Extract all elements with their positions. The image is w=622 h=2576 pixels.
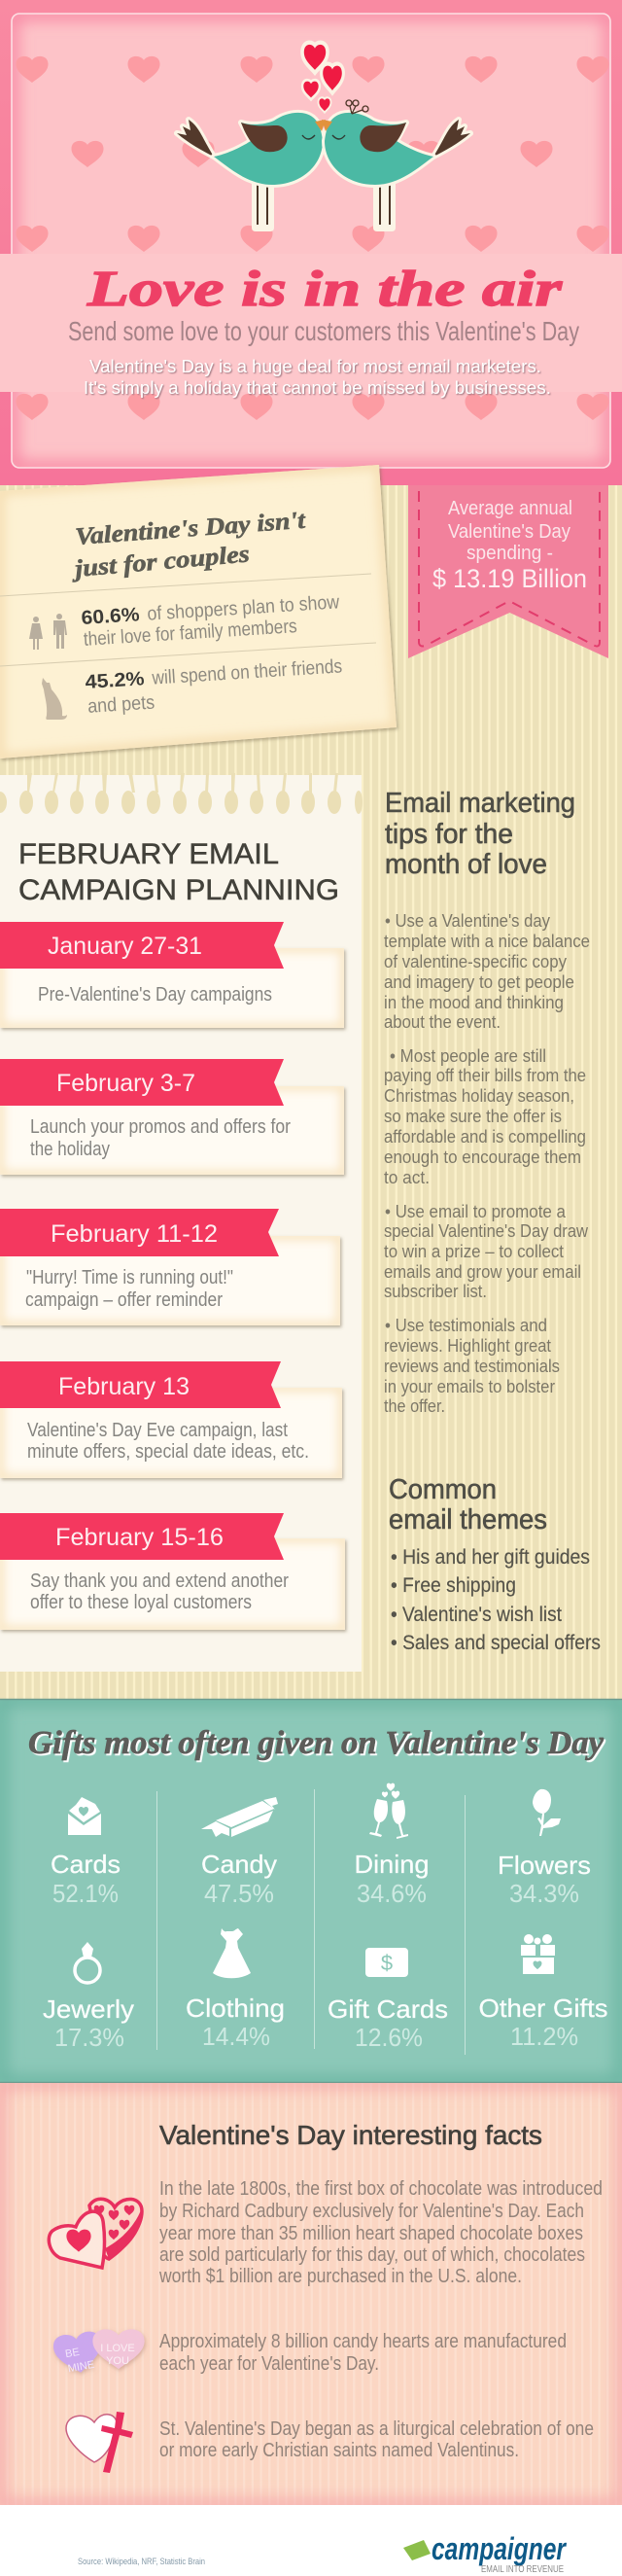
gift: clothing: 14.4% (202, 2022, 270, 2051)
item: February 11-12: "Hurry! Time is running out!" (26, 1267, 233, 1288)
fact: chocolate (158, 2178, 603, 2287)
heading (70, 508, 307, 582)
theme list: • Valentine's wish list (391, 1604, 562, 1626)
icon: candy hearts (52, 2329, 145, 2376)
fact: saint: or more early Christian saints named Valentinus. (159, 2440, 519, 2461)
panel: email campaign planning (0, 773, 363, 1672)
stat: friends: 45.2% (85, 668, 145, 693)
tip 1: template with a nice balance (384, 932, 590, 951)
icon: woman and man (29, 614, 67, 650)
torn paper holes (0, 773, 363, 814)
intro text (84, 356, 551, 398)
stat: family (81, 591, 342, 651)
gift: dining: Dining (354, 1850, 430, 1879)
source: Source: Wikipedia, NRF, Statistic Brain (78, 2557, 205, 2567)
item: February 3-7: Launch your promos and offers for (30, 1116, 291, 1138)
item: February 15-16: Say thank you and extend another (30, 1570, 289, 1592)
fact: candy hearts: each year for Valentine's Day. (159, 2353, 379, 2375)
tip 4: reviews. Highlight great (384, 1336, 551, 1356)
striped background (0, 485, 622, 1699)
tip 3: emails and grow your email (384, 1262, 581, 1282)
tip 3: to win a prize – to collect (384, 1242, 564, 1261)
heading: Valentine's Day interesting facts (159, 2120, 542, 2150)
item: February 13: February 13 (58, 1373, 190, 1400)
stat: family: of shoppers plan to show (147, 591, 340, 625)
gift: dining: 34.6% (357, 1879, 427, 1908)
tip 3 (384, 1202, 589, 1301)
intro text: Valentine's Day is a huge deal for most email marketers. (89, 356, 541, 376)
gift: cards: 52.1% (52, 1879, 119, 1908)
gift: clothing: Clothing (186, 1994, 285, 2023)
fact: chocolate: worth $1 billion are purchased in the U.S. alone. (158, 2266, 522, 2287)
item: February 3-7: the holiday (30, 1139, 110, 1160)
icon: logo envelope (403, 2540, 431, 2560)
gift: flowers: 34.3% (509, 1879, 579, 1908)
item: January 27-31 (0, 922, 344, 1028)
heading: just for couples (70, 541, 251, 582)
heading: Valentine's Day isn't (74, 508, 307, 550)
gift: jewelry: Jewerly (43, 1994, 134, 2024)
icon: candy hearts: I LOVE (100, 2343, 135, 2354)
fact: candy hearts (159, 2331, 567, 2375)
panel: spending ribbon: spending - (466, 543, 553, 564)
stat: family: 60.6% (81, 604, 140, 629)
tip 2: to act. (384, 1168, 430, 1187)
theme list: • Free shipping (391, 1574, 516, 1597)
icon: candy hearts: BE (64, 2347, 81, 2360)
logo: campaigner: campaigner (432, 2531, 567, 2566)
panel: spending ribbon: $ 13.19 Billion (432, 564, 587, 593)
icon: dress (213, 1928, 251, 1978)
icon: gift box (521, 1934, 555, 1974)
icon: candy hearts: YOU (106, 2355, 129, 2367)
icon: crest (346, 100, 368, 114)
item: February 3-7: February 3-7 (56, 1070, 195, 1097)
heading: tips for the (385, 819, 513, 850)
icon: envelope (68, 1797, 101, 1835)
panel: gifts (0, 1699, 622, 2083)
logo: campaigner (403, 2531, 567, 2575)
gift: gift cards: 12.6% (355, 2023, 423, 2052)
heading: Gifts most often given on Valentine's Day (28, 1725, 605, 1761)
icon: ring (75, 1942, 100, 1983)
item: February 13: Valentine's Day Eve campaign, last (27, 1420, 288, 1441)
fact: saint (159, 2418, 594, 2461)
gift: other gifts: Other Gifts (478, 1994, 608, 2023)
item: February 11-12: campaign – offer reminder (25, 1289, 223, 1311)
tip 3: subscriber list. (384, 1282, 487, 1301)
tip 4: in your emails to bolster (384, 1377, 555, 1396)
intro text: It's simply a holiday that cannot be missed by businesses. (84, 377, 551, 398)
heading: Common (389, 1474, 497, 1505)
gift: jewelry (43, 1942, 134, 2052)
panel: footer (78, 2531, 567, 2575)
heading (18, 838, 339, 906)
item: February 11-12 (0, 1209, 340, 1325)
tip 4 (384, 1316, 560, 1416)
tip 1: in the mood and thinking (384, 993, 564, 1012)
item: February 15-16: February 15-16 (55, 1524, 224, 1551)
heading (389, 1474, 547, 1535)
panel: couples note card (0, 465, 397, 759)
gift: candy: 47.5% (204, 1879, 274, 1908)
stat: family: their love for family members (83, 616, 297, 651)
icon: rose (533, 1789, 561, 1836)
tip 1 (384, 911, 590, 1032)
panel: hero header (0, 0, 622, 485)
gift: dining (354, 1783, 430, 1908)
stat: friends (85, 655, 344, 718)
tip 4: the offer. (384, 1396, 445, 1416)
gift: flowers: Flowers (498, 1851, 591, 1880)
heading: FEBRUARY EMAIL (18, 838, 279, 870)
gift: cards: Cards (51, 1850, 121, 1879)
icon: cat (42, 678, 67, 720)
tip 3: • Use email to promote a (385, 1202, 567, 1221)
title: Love is in the air (86, 262, 563, 317)
theme list (391, 1546, 601, 1654)
gift: jewelry: 17.3% (54, 2023, 124, 2052)
title band (0, 254, 622, 392)
tip 2: enough to encourage them (384, 1147, 581, 1167)
tip 1: • Use a Valentine's day (385, 911, 550, 931)
tip 2: affordable and is compelling (384, 1127, 586, 1147)
icon: chocolate box (49, 2199, 142, 2268)
gift: other gifts: 11.2% (510, 2022, 578, 2051)
gift: gift cards: Gift Cards (328, 1994, 448, 2024)
item: February 13: minute offers, special date ideas, etc. (27, 1441, 309, 1463)
heading: CAMPAIGN PLANNING (18, 874, 339, 906)
fact: candy hearts: Approximately 8 billion candy hearts are manufactured (159, 2331, 567, 2352)
icon: floating red hearts (303, 45, 342, 111)
item: February 15-16 (0, 1513, 345, 1630)
heading: Email marketing (385, 788, 575, 819)
icon: heart and cross (66, 2412, 133, 2473)
heading: email themes (389, 1504, 547, 1535)
gift: candy (201, 1797, 278, 1908)
icon: champagne glasses (369, 1783, 408, 1839)
gift: cards (51, 1797, 121, 1908)
heart pattern (16, 56, 609, 420)
tip 1: about the event. (384, 1012, 501, 1032)
icon: gift card: $ (381, 1951, 393, 1975)
tip 2: Christmas holiday season, (384, 1086, 574, 1106)
tip 2: so make sure the offer is (384, 1107, 562, 1126)
icon: wrapped candy box (201, 1797, 278, 1837)
tip 3: special Valentine's Day draw (384, 1221, 589, 1241)
item: February 13 (0, 1361, 342, 1478)
item: February 11-12: February 11-12 (51, 1220, 218, 1248)
theme list: • Sales and special offers (391, 1632, 601, 1654)
stitching (419, 491, 600, 646)
tip 2: • Most people are still (390, 1046, 546, 1066)
stat: friends: and pets (87, 692, 156, 718)
icon: kissing birds (177, 100, 470, 231)
panel: spending ribbon (408, 485, 608, 658)
heading (385, 788, 575, 880)
item: January 27-31: January 27-31 (48, 933, 202, 960)
panel: common email themes (389, 1474, 601, 1654)
tip 4: • Use testimonials and (385, 1316, 547, 1335)
panel: spending ribbon: Average annual (448, 498, 572, 519)
item: February 3-7 (0, 1059, 344, 1175)
gift: candy: Candy (201, 1850, 277, 1879)
theme list: • His and her gift guides (391, 1546, 590, 1569)
tip 1: and imagery to get people (384, 972, 574, 992)
tip 4: reviews and testimonials (384, 1357, 560, 1376)
logo: campaigner: EMAIL INTO REVENUE (481, 2564, 564, 2575)
stat: friends: will spend on their friends (151, 655, 343, 689)
panel: email marketing tips (384, 788, 590, 1416)
item: January 27-31: Pre-Valentine's Day campaigns (38, 984, 272, 1006)
tip 1: of valentine-specific copy (384, 952, 567, 971)
panel: spending ribbon: Valentine's Day (448, 521, 570, 543)
icon: candy hearts: MINE (67, 2359, 95, 2375)
gift: other gifts (478, 1934, 608, 2051)
tip 2: paying off their bills from the (384, 1066, 586, 1085)
gift: clothing (186, 1928, 285, 2051)
item: February 15-16: offer to these loyal customers (30, 1592, 252, 1613)
panel: interesting facts (0, 2083, 622, 2505)
gift: flowers (498, 1789, 591, 1908)
heading: month of love (385, 849, 547, 880)
tip 2 (384, 1046, 586, 1187)
gift: gift cards (328, 1948, 448, 2052)
